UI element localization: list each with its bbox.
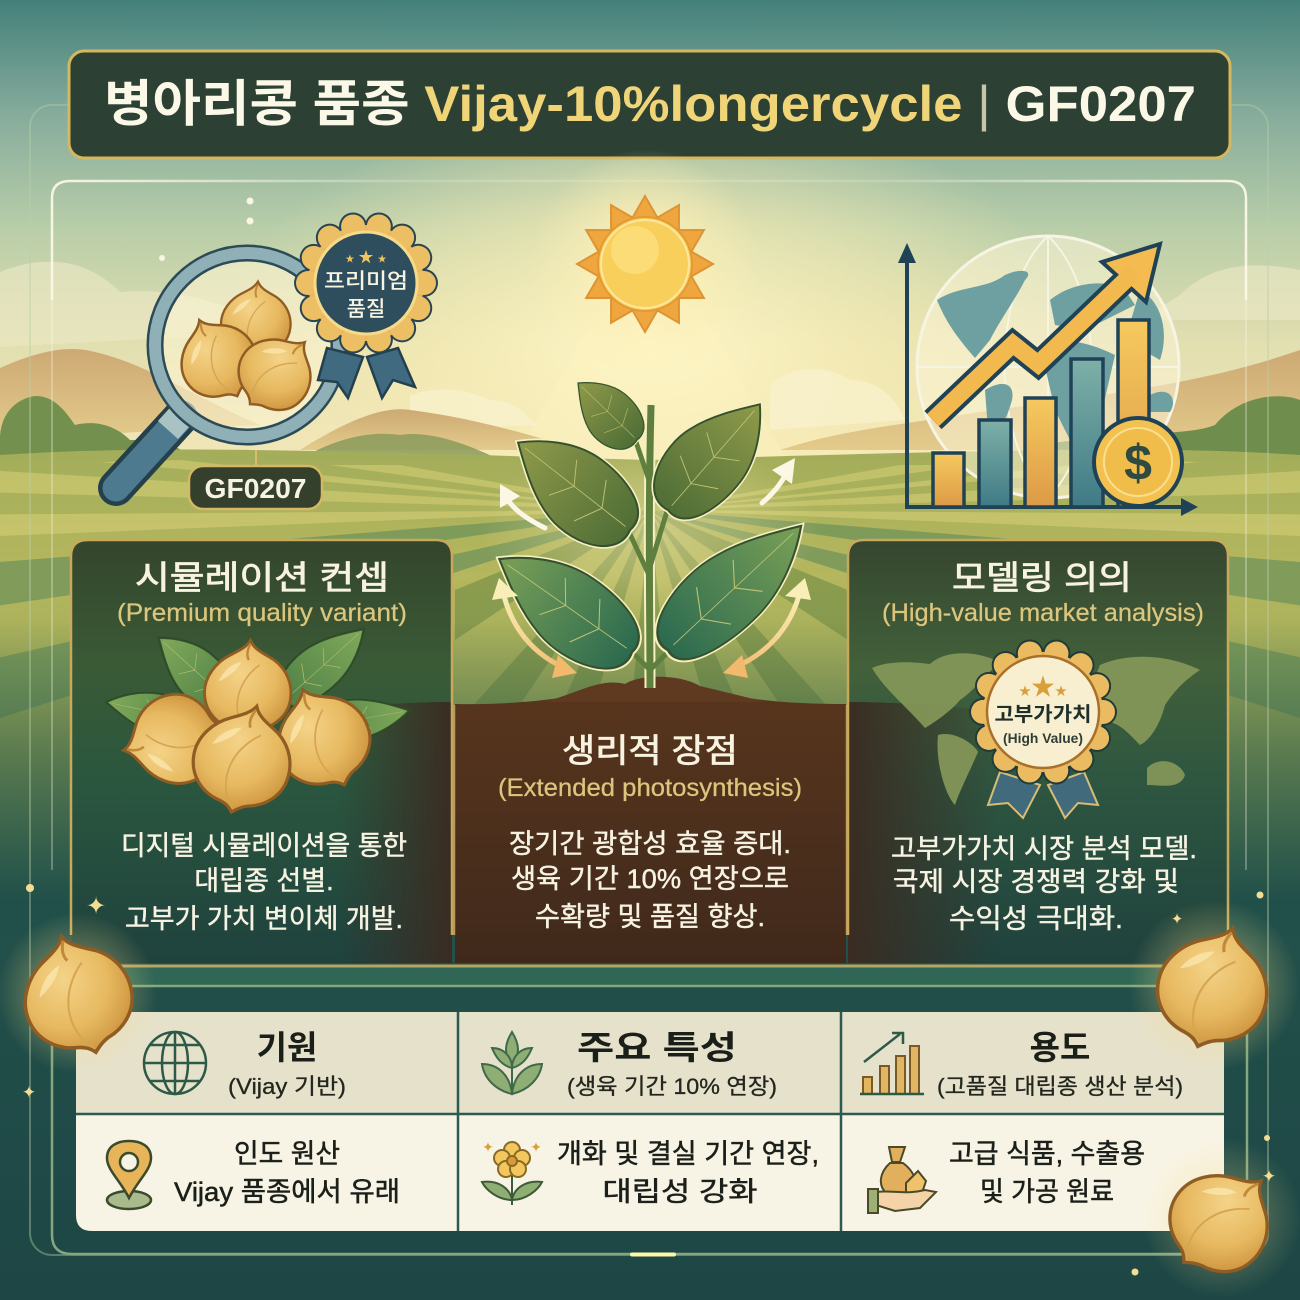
high value badge (983, 652, 1103, 818)
cell: use (860, 1029, 1183, 1099)
cell: use detail: 및 가공 원료 (980, 1177, 1114, 1207)
icon: location pin (107, 1141, 151, 1209)
body text: 국제 시장 경쟁력 강화 및 (893, 867, 1179, 897)
heading: 모델링 의의 (952, 559, 1132, 596)
dollar coin (1094, 418, 1182, 506)
cell: origin: (Vijay 기반) (228, 1074, 346, 1099)
body text: 생육 기간 10% 연장으로 (511, 864, 789, 894)
panel: simulation concept (71, 540, 452, 963)
plant (475, 365, 826, 688)
body text: 수확량 및 품질 향상. (535, 902, 765, 932)
premium quality badge (308, 225, 424, 398)
body text: 고부가가치 시장 분석 모델. (891, 834, 1197, 864)
cell: traits detail: 개화 및 결실 기간 연장, (557, 1139, 819, 1169)
high value badge: ★★★ (1019, 674, 1067, 701)
dollar coin: $ (1124, 435, 1152, 491)
sparkles: ✦ (1171, 911, 1183, 928)
info table (76, 1012, 1224, 1231)
body text: 대립종 선별. (194, 866, 334, 896)
panel: modeling significance (848, 540, 1228, 963)
body text: 장기간 광합성 효율 증대. (509, 829, 791, 859)
subheading: (Premium quality variant) (117, 599, 407, 627)
cell: traits detail: 대립성 강화 (602, 1177, 758, 1207)
premium quality badge: ★ ★ ★ (345, 249, 387, 266)
subheading: (High-value market analysis) (882, 599, 1204, 627)
cell: use: 용도 (1030, 1029, 1090, 1066)
body text (891, 834, 1197, 934)
body text: 디지털 시뮬레이션을 통한 (121, 831, 407, 861)
rising arrow (933, 244, 1160, 420)
growth arrows (492, 458, 811, 678)
globe (917, 236, 1179, 498)
body text: 수익성 극대화. (949, 904, 1123, 934)
badge label: 프리미엄 (324, 270, 408, 293)
cell: key traits: 주요 특성 (577, 1029, 737, 1066)
heading: 시뮬레이션 컨셉 (135, 559, 389, 596)
icon: sprout (482, 1032, 542, 1094)
high value badge: (High Value) (1003, 730, 1083, 746)
cell: origin detail: 인도 원산 (234, 1139, 340, 1169)
GF0207 tag: GF0207 (204, 473, 306, 504)
cell: use detail (868, 1139, 1145, 1213)
cell: origin detail (107, 1139, 400, 1209)
cell: origin (144, 1029, 346, 1099)
body text: 고부가 가치 변이체 개발. (125, 904, 403, 934)
icon: globe (144, 1032, 206, 1094)
badge label: 고부가가치 (994, 703, 1092, 726)
icon: flower: ✦ (482, 1139, 494, 1155)
title text: 병아리콩 품종 Vijay-10%longercycle | GF0207 (104, 76, 1196, 132)
body text (509, 829, 791, 932)
subheading: (Extended photosynthesis) (498, 774, 802, 802)
GF0207 tag (189, 450, 322, 509)
icon: flower (482, 1139, 542, 1205)
cell: use detail: 고급 식품, 수출용 (949, 1139, 1145, 1169)
world map (872, 653, 1200, 805)
chickpea: right corner (1129, 900, 1299, 1070)
sun (530, 149, 760, 379)
sparkles: ✦ (86, 893, 106, 920)
market growth chart (898, 236, 1198, 516)
chickpea: bottom right (1142, 1138, 1300, 1298)
body text (121, 831, 407, 934)
sparkles: ✦ (22, 1083, 36, 1102)
chickpea cluster with leaves (103, 612, 412, 822)
icon: hand with grain bag (868, 1147, 936, 1213)
icon: growth bars (860, 1033, 924, 1094)
bars (933, 320, 1149, 507)
cell: origin: 기원 (257, 1029, 317, 1066)
cell: key traits (482, 1029, 777, 1099)
cell: origin detail: Vijay 품종에서 유래 (174, 1177, 400, 1207)
icon: flower: ✦ (530, 1139, 542, 1155)
cell: key traits: (생육 기간 10% 연장) (567, 1074, 777, 1099)
premium quality badge: 품질 (347, 298, 385, 321)
panel: physiological advantages (454, 365, 847, 963)
heading: 생리적 장점 (562, 732, 738, 769)
cell: traits detail (482, 1139, 819, 1207)
cell: use: (고품질 대립종 생산 분석) (937, 1074, 1183, 1099)
title banner (69, 51, 1230, 158)
chickpea: left corner (0, 913, 157, 1073)
magnifying glass with chickpeas (116, 253, 339, 488)
chickpea trio in lens (164, 282, 331, 428)
sparkles: ✦ (1262, 1167, 1276, 1186)
